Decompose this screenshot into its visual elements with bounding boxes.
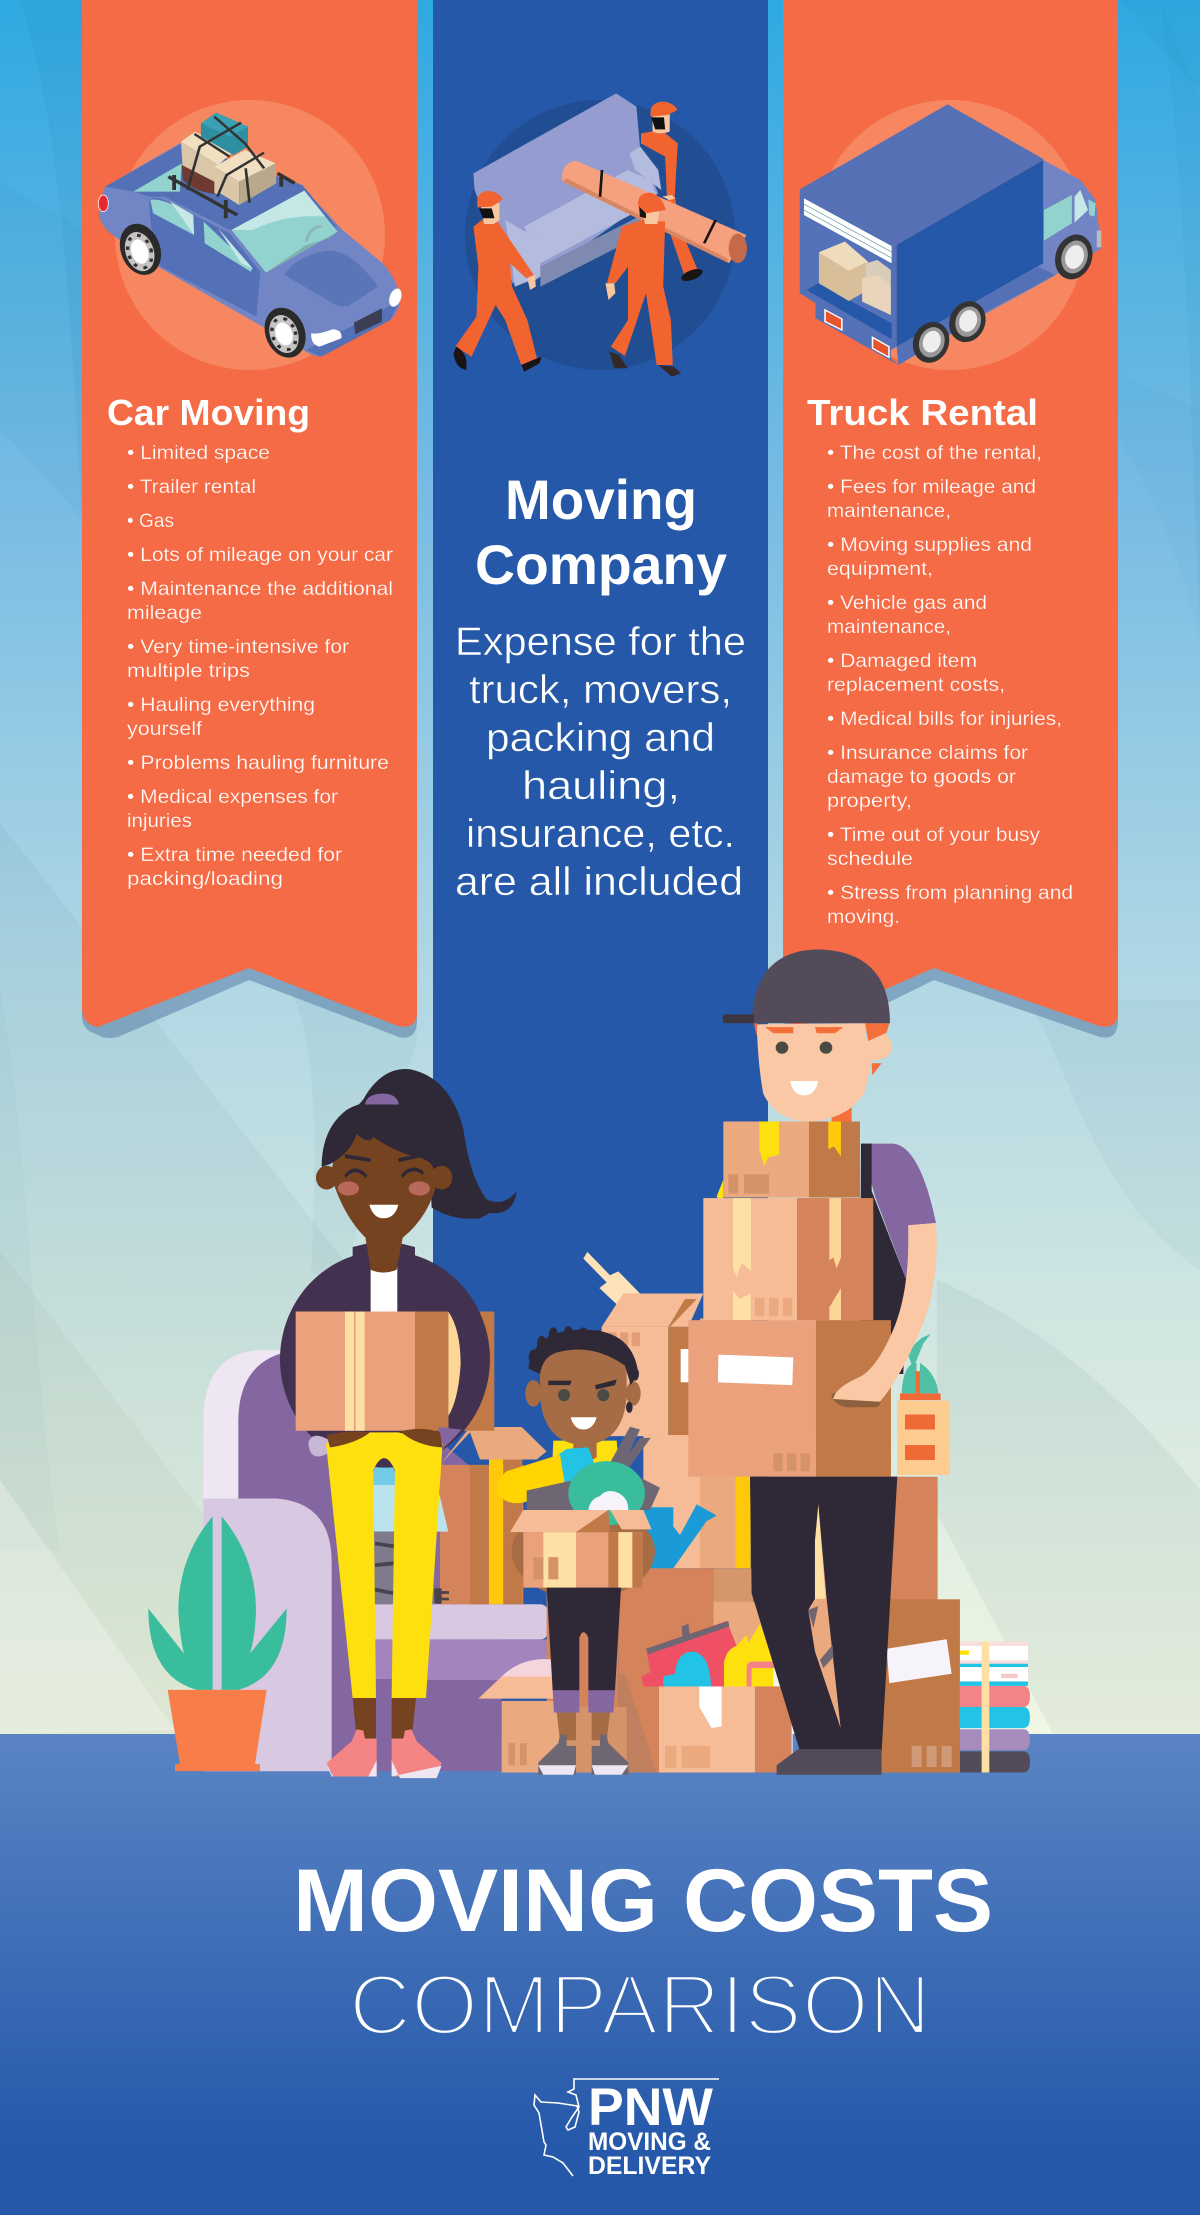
stacked boxes behind xyxy=(478,1180,768,1772)
car moving list xyxy=(127,443,394,890)
icon: Washington state outline xyxy=(534,2079,719,2176)
title: MOVING COSTS xyxy=(293,1850,993,1950)
title xyxy=(293,1850,993,2053)
subtitle: COMPARISON xyxy=(349,1958,931,2053)
car moving list: • Limited space xyxy=(127,443,270,464)
mover: left xyxy=(453,191,542,372)
background: sky gradient with waves xyxy=(0,0,1200,1735)
truck rental list: property, xyxy=(827,791,912,812)
items between legs xyxy=(373,1459,434,1771)
illustration: movers carrying sofa and rug xyxy=(453,93,747,377)
truck rental list: maintenance, xyxy=(827,501,951,522)
car moving list: • Problems hauling furniture xyxy=(127,753,389,774)
panel: moving company column xyxy=(433,0,768,1735)
car moving list: • Lots of mileage on your car xyxy=(127,545,394,566)
truck rental list: replacement costs, xyxy=(827,675,1005,696)
man xyxy=(688,949,937,1775)
moving company paragraph: Expense for the xyxy=(455,620,746,664)
truck rental list: • Fees for mileage and xyxy=(827,477,1036,498)
car moving list: packing/loading xyxy=(127,869,283,890)
moving company paragraph xyxy=(455,620,746,904)
mover: back xyxy=(641,102,705,283)
truck rental list: • Damaged item xyxy=(827,651,977,672)
front wheel xyxy=(259,304,311,361)
truck rental list: • Medical bills for injuries, xyxy=(827,709,1062,730)
shoes xyxy=(327,1729,377,1777)
car circle xyxy=(115,100,385,370)
car moving list: • Gas xyxy=(127,511,174,532)
moving company heading: Moving xyxy=(505,468,697,531)
truck rental list: • The cost of the rental, xyxy=(827,443,1042,464)
moving company heading xyxy=(475,468,727,596)
truck rental list: • Moving supplies and xyxy=(827,535,1032,556)
truck rental list: • Stress from planning and xyxy=(827,883,1073,904)
panel: car moving banner xyxy=(82,0,417,1038)
armchair xyxy=(203,1350,550,1771)
spatula xyxy=(583,1252,640,1307)
woman xyxy=(280,1069,517,1778)
box at boy's left xyxy=(478,1659,570,1772)
rug xyxy=(562,161,747,263)
front box xyxy=(659,1686,792,1772)
truck circle xyxy=(815,100,1085,370)
moving company paragraph: are all included xyxy=(455,860,743,904)
icon: truck rental box truck xyxy=(800,104,1101,366)
roof rack xyxy=(168,173,295,218)
moving company paragraph: insurance, etc. xyxy=(466,812,735,856)
car moving list: yourself xyxy=(127,719,203,740)
boy xyxy=(497,1326,660,1775)
panel: truck rental banner xyxy=(783,0,1118,1038)
truck rental list: • Insurance claims for xyxy=(827,743,1029,764)
car moving list: • Medical expenses for xyxy=(127,787,339,808)
truck rental heading: Truck Rental xyxy=(807,392,1038,433)
truck rental list: • Vehicle gas and xyxy=(827,593,987,614)
illustration: armchair, plant, woman xyxy=(148,1069,550,1778)
truck rental list: equipment, xyxy=(827,559,933,580)
car moving list: • Maintenance the additional xyxy=(127,579,393,600)
logo: PNW Moving & Delivery: PNW xyxy=(588,2078,713,2137)
mover: front xyxy=(605,193,681,377)
car moving list: • Hauling everything xyxy=(127,695,315,716)
sofa xyxy=(473,93,661,287)
logo: PNW Moving & Delivery: MOVING & xyxy=(588,2128,711,2156)
logo: PNW Moving & Delivery xyxy=(534,2078,719,2180)
car moving list: mileage xyxy=(127,603,202,624)
car moving list: • Trailer rental xyxy=(127,477,256,498)
truck rental list: schedule xyxy=(827,849,913,870)
car moving list: • Extra time needed for xyxy=(127,845,343,866)
rear wheel xyxy=(114,220,167,279)
moving company paragraph: packing and xyxy=(486,716,715,760)
luggage xyxy=(181,113,276,205)
footer panel xyxy=(0,1734,1200,2215)
right boxes xyxy=(882,1477,960,1772)
car moving list: multiple trips xyxy=(127,661,250,682)
moving company paragraph: truck, movers, xyxy=(469,668,732,712)
moving company paragraph: hauling, xyxy=(522,764,680,808)
icon: car with luggage on roof xyxy=(98,113,404,361)
items in boy's box xyxy=(497,1427,660,1526)
logo: PNW Moving & Delivery: DELIVERY xyxy=(588,2152,711,2180)
cargo boxes xyxy=(819,242,891,315)
small plant box xyxy=(897,1334,950,1475)
box held by woman xyxy=(296,1312,461,1431)
truck rental list: maintenance, xyxy=(827,617,951,638)
car moving list: injuries xyxy=(127,811,192,832)
watering can xyxy=(643,1504,717,1568)
car moving heading: Car Moving xyxy=(107,392,310,433)
truck rental list: damage to goods or xyxy=(827,767,1017,788)
illustration: boxes, boy, man xyxy=(478,949,1030,1775)
truck wheels xyxy=(909,231,1097,366)
truck rental list xyxy=(827,443,1073,928)
truck rental list: moving. xyxy=(827,907,900,928)
boxes behind woman xyxy=(427,1312,547,1604)
icon: potted plant xyxy=(148,1516,287,1771)
man's box stack xyxy=(688,1121,891,1477)
box held by boy xyxy=(510,1510,652,1588)
stack of books and towels xyxy=(960,1642,1030,1772)
box contents xyxy=(642,1621,793,1759)
icon: dark circle behind movers xyxy=(465,100,735,370)
car moving list: • Very time-intensive for xyxy=(127,637,350,658)
moving company heading: Company xyxy=(475,533,727,596)
truck rental list: • Time out of your busy xyxy=(827,825,1041,846)
